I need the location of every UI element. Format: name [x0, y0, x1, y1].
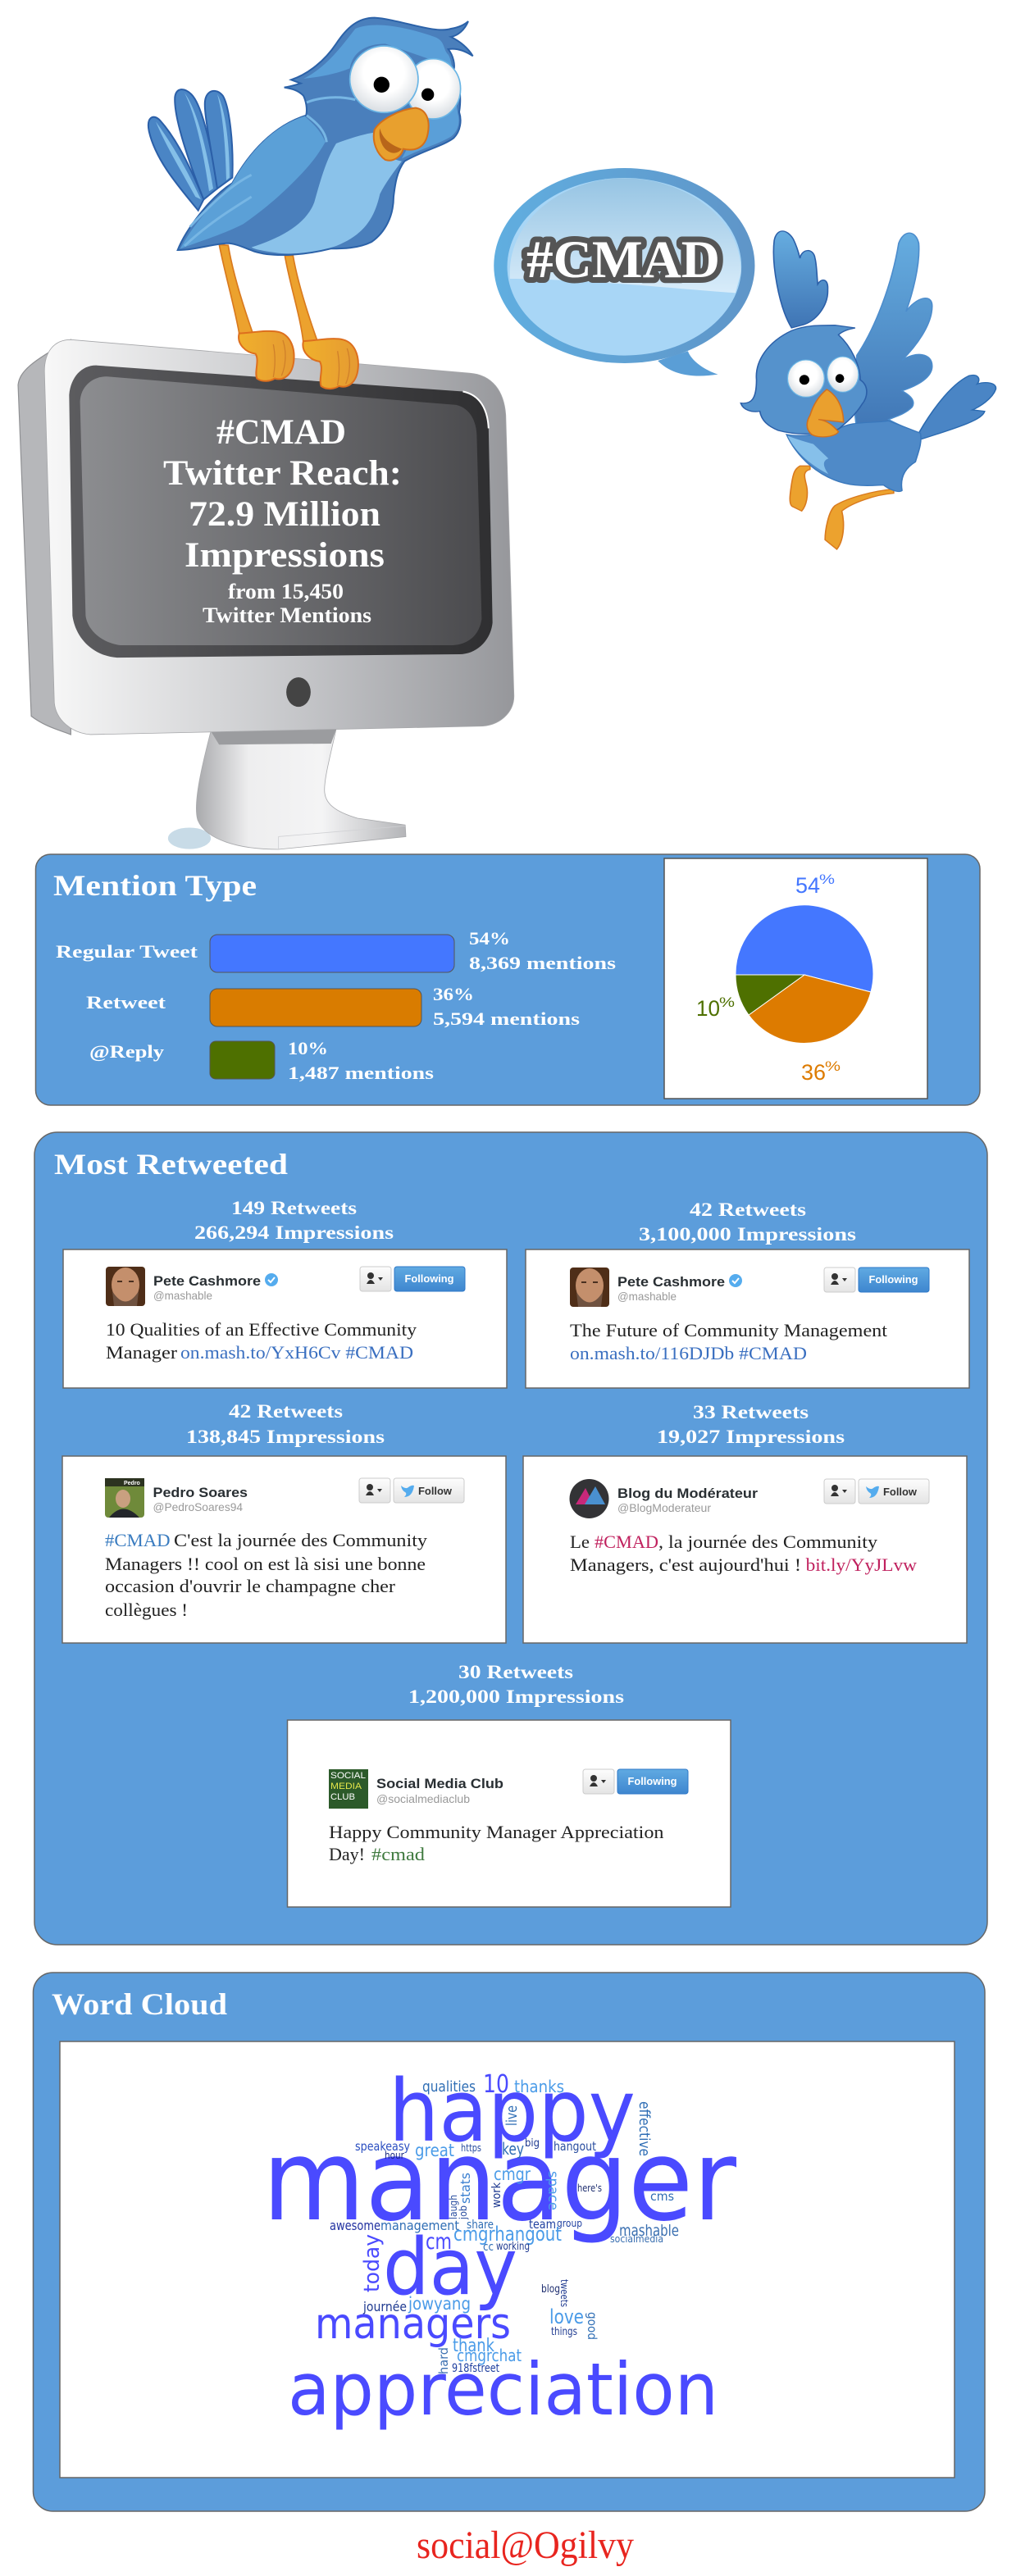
- word cloud: mashable: [619, 2222, 679, 2240]
- monitor screen text: Twitter Mentions: [203, 603, 371, 627]
- word cloud: cc: [483, 2241, 494, 2254]
- footer: social@Ogilvy: social@Ogilvy: [417, 2524, 634, 2567]
- tweet card 4: #CMAD: [595, 1531, 658, 1552]
- buttons: [359, 1478, 464, 1503]
- pie chart: 36: [801, 1060, 826, 1085]
- tweet card 4: Le: [570, 1531, 590, 1552]
- tweet card 5: Social Media Club: [376, 1776, 503, 1791]
- word cloud: blog: [541, 2283, 560, 2296]
- word cloud: hangout: [554, 2139, 596, 2154]
- word cloud: hard: [436, 2347, 451, 2374]
- bar chart: mention types: 10%: [288, 1038, 328, 1058]
- tweet 2 caption: [639, 1199, 856, 1245]
- heading: most retweeted: Most Retweeted: [54, 1148, 288, 1181]
- tweet card 5: @socialmediaclub: [376, 1792, 470, 1805]
- icon: verified badge: [729, 1274, 742, 1287]
- tweet card 4: @BlogModerateur: [617, 1501, 711, 1514]
- word cloud: socialmedia: [610, 2233, 663, 2245]
- buttons: [583, 1769, 688, 1794]
- bar chart: mention types: @Reply: [89, 1041, 164, 1062]
- tweet card 1: @mashable: [153, 1289, 212, 1302]
- word cloud: qualities: [422, 2078, 476, 2096]
- tweet 3 caption: 138,845 Impressions: [186, 1427, 385, 1447]
- word cloud: awesome: [330, 2218, 380, 2233]
- tweet 1 caption: [194, 1198, 394, 1243]
- tweet 2 caption: 3,100,000 Impressions: [639, 1224, 856, 1245]
- icon: flying bird: [740, 231, 995, 549]
- monitor screen text: Twitter Reach:: [163, 454, 402, 493]
- tweet 3 caption: [186, 1401, 385, 1447]
- bubble shape: [494, 168, 754, 375]
- word cloud: thank: [453, 2336, 494, 2356]
- word cloud: live: [503, 2105, 521, 2126]
- word cloud: work: [490, 2182, 503, 2208]
- pie chart: %: [719, 994, 735, 1010]
- pie chart: 10: [696, 996, 720, 1021]
- word cloud: things: [551, 2326, 577, 2338]
- avatar: Social Media Club: [329, 1769, 368, 1809]
- word cloud: big: [525, 2137, 540, 2150]
- word cloud: laugh: [448, 2195, 459, 2219]
- tweet card 4: [523, 1456, 967, 1643]
- panel: mention type: [36, 854, 980, 1105]
- word cloud: hour: [385, 2150, 404, 2161]
- monitor screen text: #CMAD: [216, 413, 346, 452]
- tweet card 5: #cmad: [371, 1844, 425, 1864]
- icon: verified badge: [265, 1273, 278, 1286]
- word cloud: good: [585, 2312, 599, 2340]
- word cloud: cms: [650, 2189, 674, 2204]
- buttons: [824, 1268, 929, 1292]
- tweet card 3: Managers !! cool on est là sisi une bonne: [105, 1554, 426, 1574]
- avatar: Blog du Modérateur: [569, 1479, 608, 1518]
- heading: mention type: Mention Type: [53, 869, 257, 902]
- tweet card 2: [526, 1249, 969, 1388]
- tweet card 3: C'est la journée des Community: [174, 1530, 427, 1550]
- monitor screen text: 72.9 Million: [189, 495, 380, 534]
- word cloud: management: [380, 2218, 459, 2233]
- tweet 4 caption: [657, 1402, 845, 1447]
- monitor screen text: [163, 413, 402, 627]
- tweet card 3: [62, 1456, 506, 1643]
- tweet 1 caption: 149 Retweets: [231, 1198, 357, 1218]
- word cloud: group: [557, 2218, 582, 2229]
- buttons: [360, 1267, 465, 1291]
- buttons: Following: [405, 1272, 454, 1285]
- bar chart: mention types: 36%: [433, 984, 474, 1004]
- tweet card 2: on.mash.to/116DJDb #CMAD: [570, 1343, 807, 1363]
- tweet card 3: Pedro Soares: [153, 1485, 248, 1500]
- tweet card 4: Managers, c'est aujourd'hui !: [570, 1554, 801, 1575]
- tweet card 3: occasion d'ouvrir le champagne cher: [105, 1576, 396, 1596]
- pie chart: %: [825, 1058, 841, 1074]
- bubble text: #CMAD: [526, 230, 720, 289]
- bar chart: mention types: 54%: [469, 928, 510, 949]
- word cloud: appreciation: [288, 2347, 718, 2432]
- word cloud: key: [502, 2139, 524, 2159]
- tweet card 2: The Future of Community Management: [570, 1320, 887, 1340]
- avatar: Social Media Club: MEDIA: [330, 1782, 362, 1791]
- word cloud: cmgr: [494, 2164, 531, 2184]
- word cloud: great: [415, 2141, 454, 2160]
- tweet 1 caption: 266,294 Impressions: [194, 1222, 394, 1243]
- buttons: [824, 1479, 929, 1504]
- tweet card 5: Day!: [329, 1844, 365, 1864]
- tweet card 4: , la journée des Community: [658, 1531, 877, 1552]
- word cloud: thanks: [514, 2077, 564, 2096]
- tweet card 1: 10 Qualities of an Effective Community: [106, 1319, 417, 1340]
- word cloud: day: [383, 2223, 517, 2313]
- icon: perched bird: [148, 18, 473, 389]
- monitor body: [18, 339, 514, 735]
- tweet card 1: on.mash.to/YxH6Cv #CMAD: [180, 1342, 413, 1363]
- monitor illustration: [18, 339, 514, 849]
- heading: word cloud: Word Cloud: [52, 1988, 227, 2022]
- word cloud: stats: [458, 2173, 473, 2204]
- word cloud: share: [467, 2219, 494, 2232]
- tweet 4 caption: 33 Retweets: [693, 1402, 809, 1422]
- tweet 5 caption: 1,200,000 Impressions: [408, 1686, 624, 1707]
- monitor screen text: Impressions: [185, 536, 385, 575]
- pie chart: %: [819, 872, 835, 887]
- tweet 2 caption: 42 Retweets: [690, 1199, 806, 1220]
- tweet card 2: @mashable: [617, 1290, 677, 1303]
- speech bubble: [494, 168, 754, 375]
- word cloud: 918fstreet: [452, 2362, 499, 2375]
- word cloud: [262, 2061, 737, 2432]
- buttons: Following: [869, 1273, 918, 1286]
- bar chart: mention types: 1,487 mentions: [288, 1063, 435, 1083]
- tweet 4 caption: 19,027 Impressions: [657, 1427, 845, 1447]
- word cloud: happy: [389, 2061, 636, 2161]
- monitor screen text: from 15,450: [228, 580, 344, 603]
- monitor stand: [168, 730, 406, 849]
- tweet card 4: bit.ly/YyJLvw: [806, 1554, 917, 1575]
- word cloud: effective: [636, 2101, 653, 2156]
- tweet card 4: Blog du Modérateur: [617, 1486, 758, 1501]
- avatar: Pete Cashmore: [106, 1267, 145, 1306]
- avatar: Social Media Club: CLUB: [330, 1792, 355, 1802]
- panel: most retweeted: [34, 1132, 987, 1945]
- word cloud: team: [529, 2217, 556, 2232]
- tweet card 1: Manager: [106, 1342, 178, 1363]
- word cloud: space: [544, 2171, 561, 2210]
- word cloud: managers: [315, 2300, 511, 2349]
- bar chart: mention types: [56, 928, 617, 1083]
- panel: word cloud: [33, 1973, 985, 2511]
- word cloud: jowyang: [408, 2294, 471, 2314]
- bar chart: mention types: Regular Tweet: [56, 941, 198, 962]
- avatar: Social Media Club: SOCIAL: [330, 1771, 366, 1781]
- bar chart: mention types: 8,369 mentions: [469, 953, 617, 973]
- word cloud: manager: [262, 2116, 737, 2246]
- word cloud: love: [549, 2305, 584, 2328]
- pie chart: 54: [795, 873, 820, 898]
- bar chart: mention types: Retweet: [86, 992, 166, 1013]
- word cloud: here's: [577, 2182, 602, 2194]
- word cloud: 10: [483, 2070, 509, 2099]
- avatar: Pete Cashmore: [570, 1268, 609, 1307]
- tweet card 3: @PedroSoares94: [153, 1500, 243, 1513]
- tweet card 3: #CMAD: [105, 1530, 171, 1550]
- tweet 5 caption: [408, 1662, 624, 1707]
- tweet card 5: [287, 1720, 731, 1907]
- avatar: Pedro Soares: [105, 1478, 144, 1518]
- tweet card 2: Pete Cashmore: [617, 1274, 725, 1290]
- word cloud: speakeasy: [355, 2139, 410, 2154]
- buttons: Following: [628, 1775, 677, 1787]
- pie chart: [664, 858, 927, 1099]
- tweet card 1: [63, 1249, 507, 1388]
- word cloud: journée: [362, 2299, 407, 2314]
- word cloud: job: [458, 2205, 469, 2220]
- tweet card 1: Pete Cashmore: [153, 1273, 261, 1289]
- bar chart: mention types: 5,594 mentions: [433, 1008, 581, 1029]
- word cloud: cmgrchat: [457, 2346, 522, 2365]
- word cloud: cmgrhangout: [453, 2223, 562, 2246]
- word cloud: today: [360, 2234, 385, 2292]
- word cloud: tweets: [558, 2279, 570, 2307]
- tweet 5 caption: 30 Retweets: [458, 1662, 573, 1682]
- word cloud: cm: [426, 2229, 452, 2255]
- tweet card 3: collègues !: [105, 1600, 188, 1620]
- tweet card 5: Happy Community Manager Appreciation: [329, 1822, 664, 1842]
- word cloud: working: [496, 2241, 530, 2253]
- word cloud: https: [461, 2142, 481, 2154]
- buttons: Follow: [883, 1486, 918, 1498]
- buttons: Follow: [418, 1485, 453, 1497]
- tweet 3 caption: 42 Retweets: [229, 1401, 343, 1422]
- avatar: Pedro Soares: Pedro: [124, 1481, 140, 1486]
